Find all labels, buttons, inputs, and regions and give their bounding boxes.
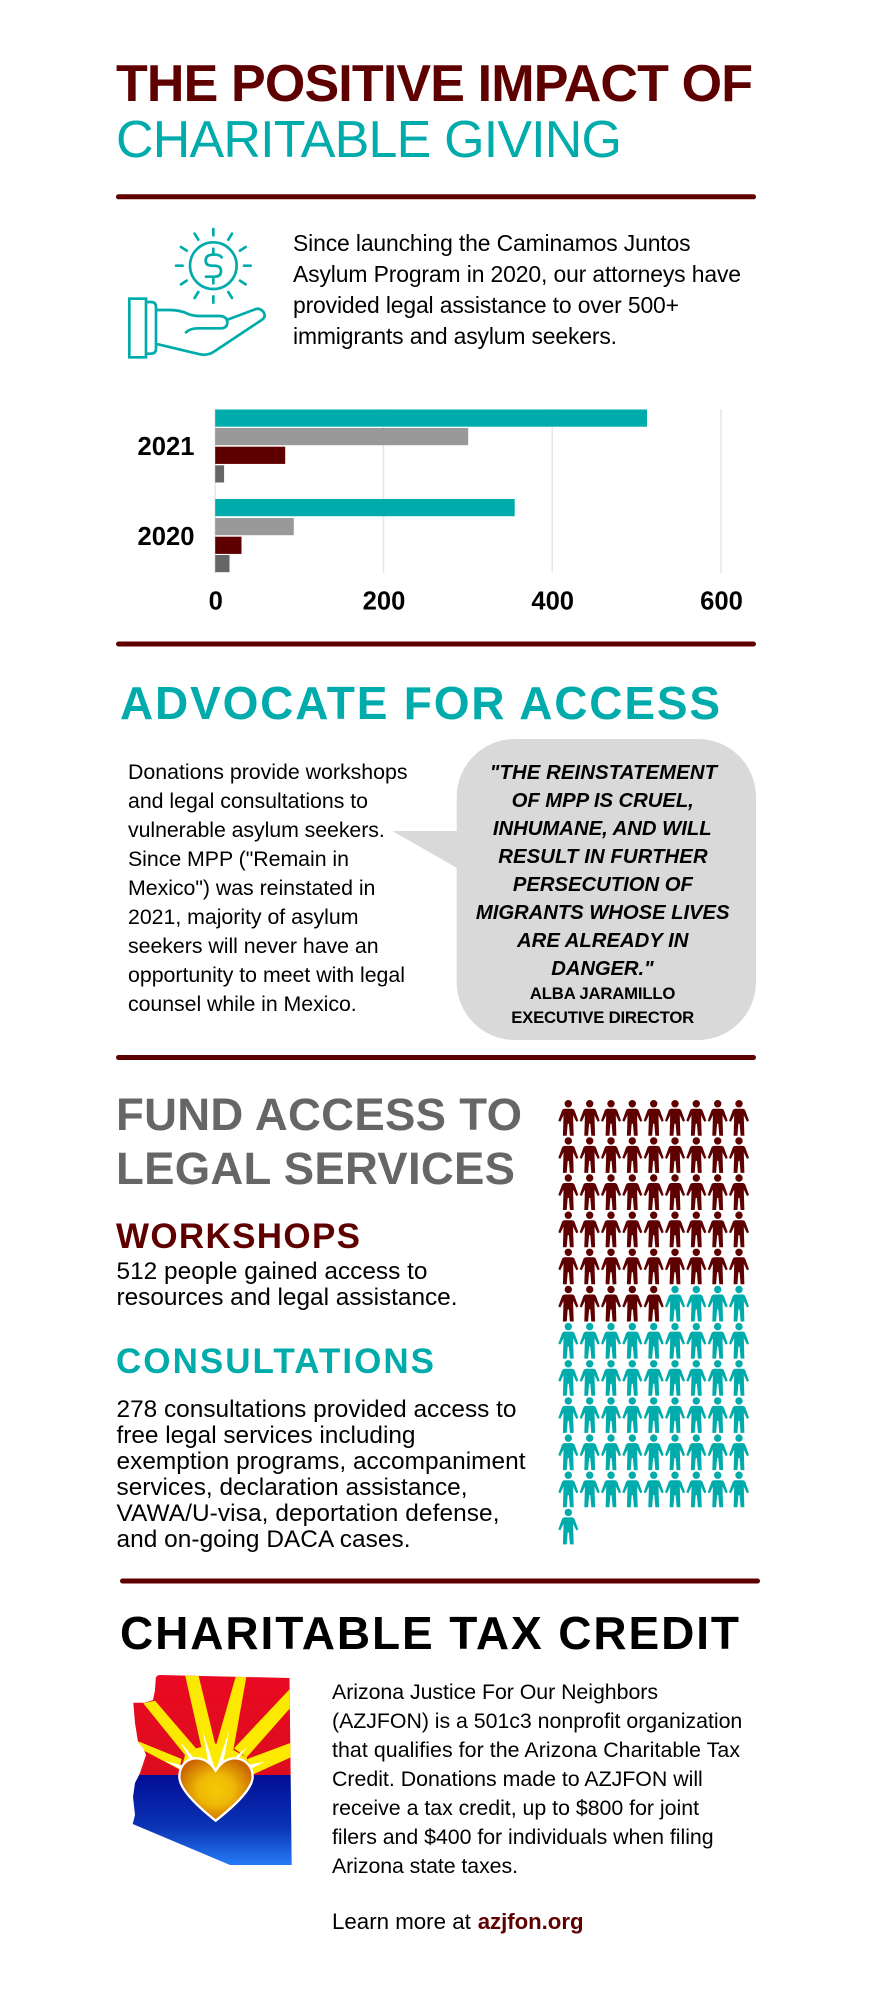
maroon people [558, 1100, 749, 1322]
text: consultations: free legal services including [116, 1422, 416, 1449]
heart [179, 1758, 253, 1821]
text: donations: and legal consultations to [128, 789, 368, 813]
2020 bars [215, 499, 515, 572]
link text [332, 1909, 584, 1934]
quote: ARE ALREADY IN [516, 930, 689, 952]
value axis: 0 [209, 587, 223, 615]
value axis [209, 587, 743, 615]
quote [476, 762, 730, 980]
category labels [138, 433, 194, 551]
quote: RESULT IN FURTHER [498, 846, 708, 868]
text: tax credit: that qualifies for the Arizona Charitable Tax [332, 1738, 740, 1762]
heading: fund access [116, 1089, 522, 1194]
value axis: 600 [700, 587, 743, 615]
text: donations: Since MPP ("Remain in [128, 847, 349, 871]
text: donations [128, 760, 408, 1016]
intro text: Since launching the Caminamos Juntos [293, 230, 691, 256]
callout: quote bubble [392, 739, 756, 1040]
attribution [511, 984, 694, 1027]
text: tax credit: Arizona Justice For Our Neighbors [332, 1680, 658, 1704]
text: donations: vulnerable asylum seekers. [128, 818, 385, 842]
quote: "THE REINSTATEMENT [490, 762, 719, 784]
quote: INHUMANE, AND WILL [493, 818, 712, 840]
text: consultations: 278 consultations provided access to [116, 1396, 516, 1423]
intro text: provided legal assistance to over 500+ [293, 292, 679, 318]
icon: arizona heart map [132, 1675, 292, 1865]
text: consultations: VAWA/U-visa, deportation defense, [116, 1500, 500, 1527]
text: tax credit [332, 1680, 742, 1878]
quote: OF MPP IS CRUEL, [512, 790, 694, 812]
text: donations: counsel while in Mexico. [128, 992, 357, 1016]
value axis: 200 [363, 587, 405, 615]
bar chart [138, 409, 743, 615]
heading: charitable tax credit: CHARITABLE TAX CREDIT [120, 1607, 739, 1659]
heading: fund access: FUND ACCESS TO [116, 1089, 522, 1140]
text: donations: seekers will never have an [128, 934, 379, 958]
text: workshops [116, 1258, 458, 1311]
text: consultations [116, 1396, 526, 1553]
subheading: consultations: CONSULTATIONS [116, 1342, 434, 1381]
attribution: ALBA JARAMILLO [530, 984, 675, 1003]
text: consultations: services, declaration assistance, [116, 1474, 468, 1501]
text: donations: opportunity to meet with legal [128, 963, 405, 987]
icon: hand holding coin [129, 229, 265, 357]
category labels: 2021 [138, 433, 194, 461]
intro text [293, 230, 741, 349]
heading: advocate for access: ADVOCATE FOR ACCESS [120, 677, 720, 729]
text: tax credit: Credit. Donations made to AZJFON will [332, 1767, 703, 1791]
quote: PERSECUTION OF [513, 874, 694, 896]
link text: Learn more at [332, 1909, 472, 1934]
text: donations: 2021, majority of asylum [128, 905, 358, 929]
text: tax credit: filers and $400 for individuals when filing [332, 1825, 714, 1849]
text: tax credit: receive a tax credit, up to $800 for joint [332, 1796, 699, 1820]
intro text: immigrants and asylum seekers. [293, 323, 617, 349]
attribution: EXECUTIVE DIRECTOR [511, 1008, 694, 1027]
text: workshops: 512 people gained access to [116, 1258, 428, 1285]
pictogram: people [558, 1100, 749, 1544]
text: tax credit: Arizona state taxes. [332, 1854, 518, 1878]
text: tax credit: (AZJFON) is a 501c3 nonprofit organization [332, 1709, 742, 1733]
quote: MIGRANTS WHOSE LIVES [476, 902, 730, 924]
text: workshops: resources and legal assistance. [116, 1284, 458, 1311]
quote: DANGER." [551, 958, 654, 980]
text: consultations: and on-going DACA cases. [116, 1526, 410, 1553]
text: donations: Mexico") was reinstated in [128, 876, 375, 900]
heading: fund access: LEGAL SERVICES [116, 1143, 515, 1194]
text: consultations: exemption programs, accompaniment [116, 1448, 526, 1475]
value axis: 400 [531, 587, 574, 615]
teal people [558, 1286, 749, 1544]
2021 bars [215, 410, 647, 482]
title: THE POSITIVE IMPACT OF [116, 55, 753, 113]
subheading: workshops: WORKSHOPS [116, 1217, 360, 1256]
title [116, 55, 753, 169]
text: donations: Donations provide workshops [128, 760, 408, 784]
title: CHARITABLE GIVING [116, 111, 622, 169]
link text: azjfon.org [478, 1909, 584, 1934]
intro text: Asylum Program in 2020, our attorneys have [293, 261, 741, 287]
category labels: 2020 [138, 523, 194, 551]
